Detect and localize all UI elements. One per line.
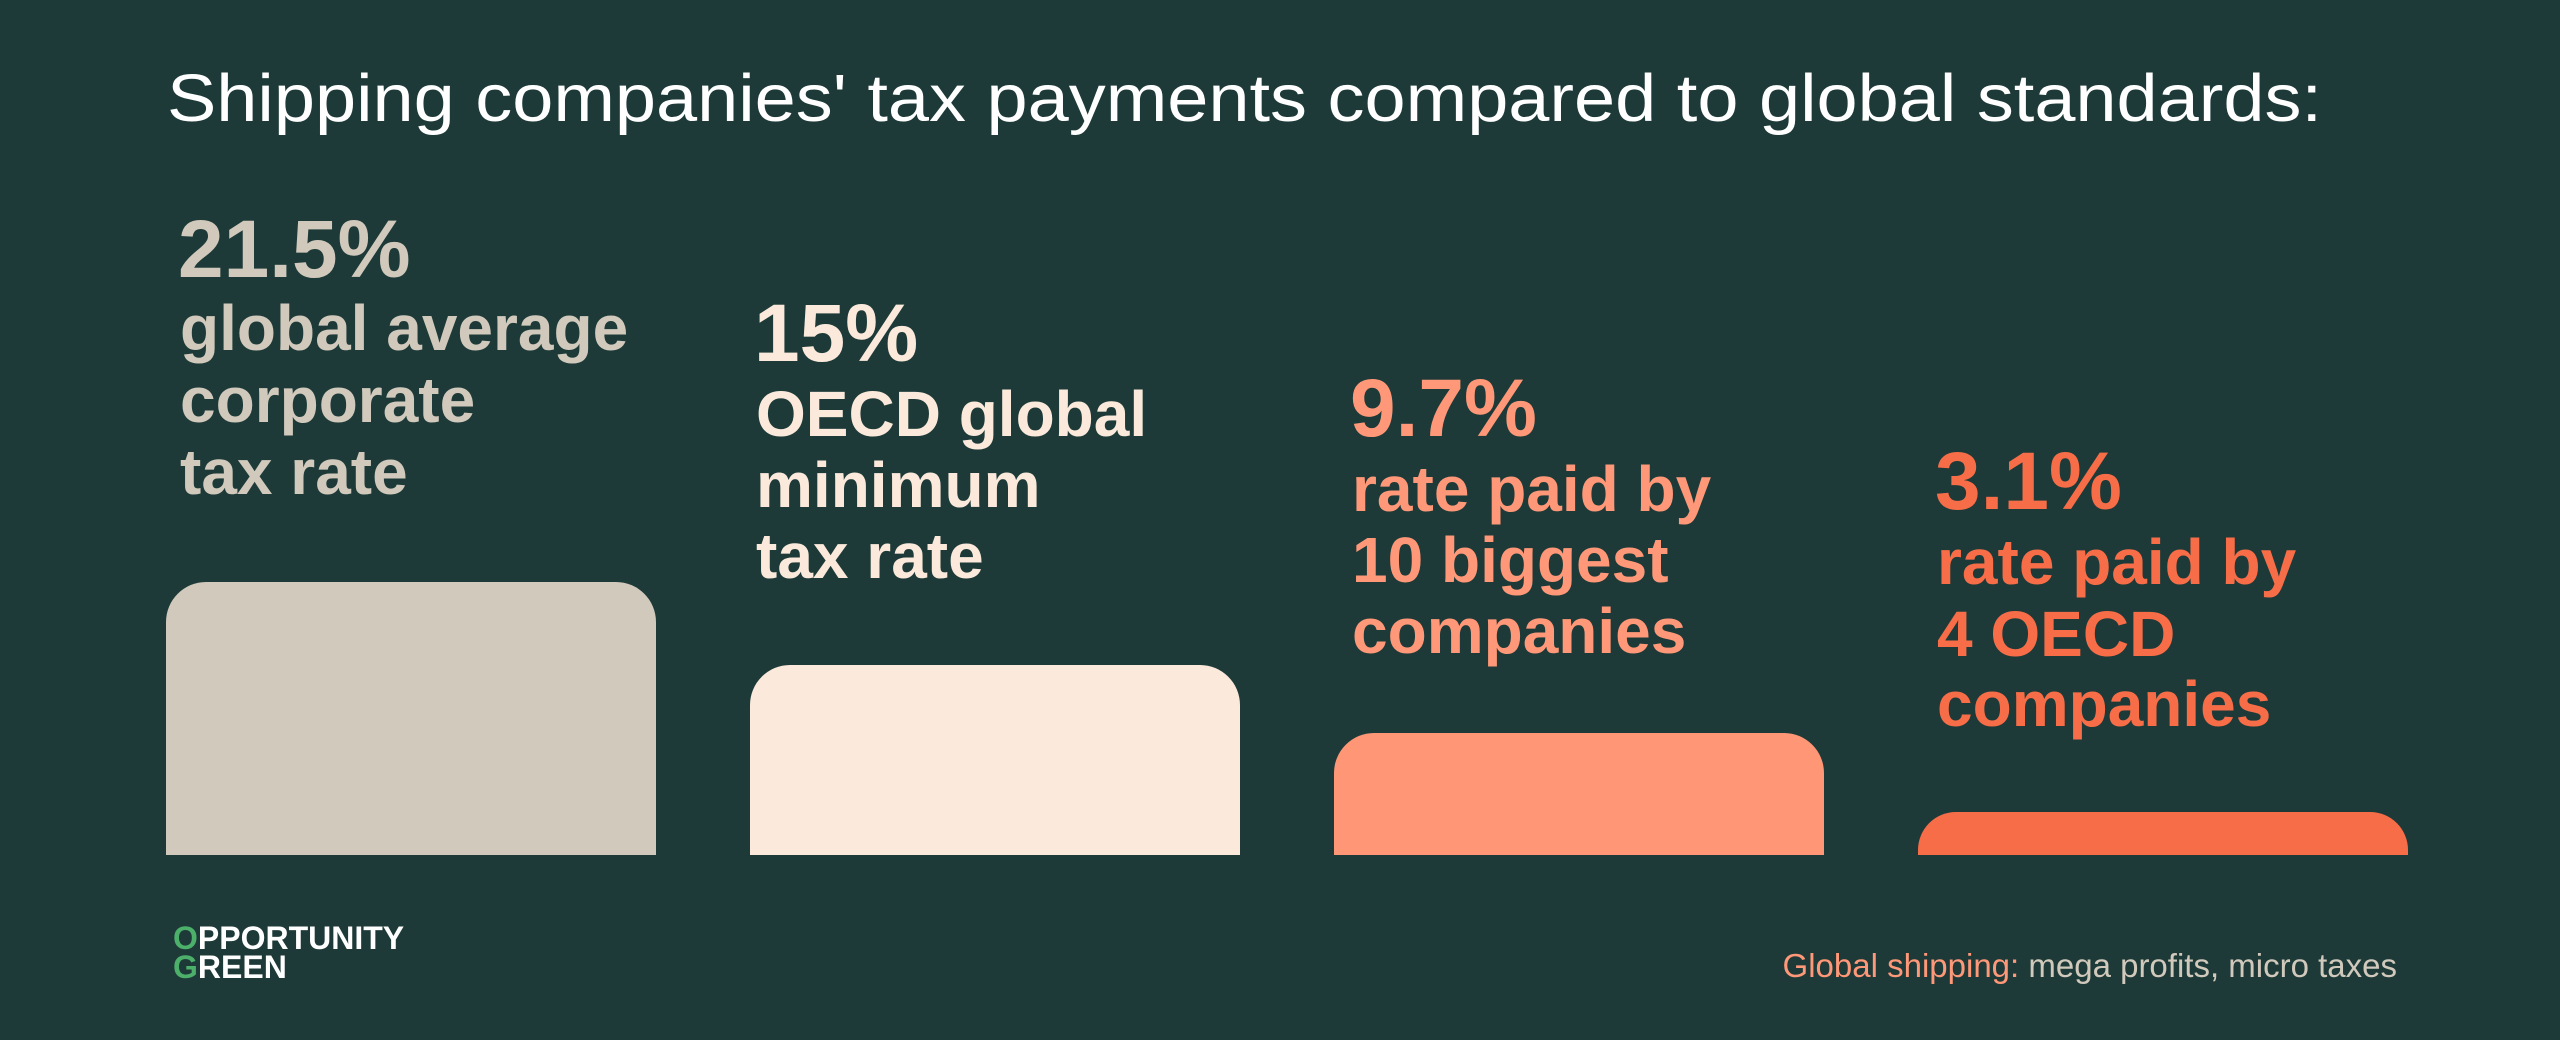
bar: 21.5% [166,582,656,855]
label: rate paid by 4 OECD companies: 4 OECD [1937,598,2175,670]
label: rate paid by 4 OECD companies [1937,526,2297,740]
panel: OECD minimum [750,288,1240,855]
label: rate paid by 10 biggest companies: companies [1352,595,1686,667]
title: Shipping companies' tax payments compared to global standards: [167,61,2322,136]
label: global average corporate tax rate: tax rate [180,436,408,508]
panel: 4 OECD companies [1918,436,2408,855]
label: rate paid by 4 OECD companies: rate paid by [1937,526,2297,598]
label: global average corporate tax rate: global average [180,292,628,364]
label: OECD global minimum tax rate [756,378,1147,592]
bar: 9.7% [1334,733,1824,855]
panel: 10 biggest companies [1334,363,1824,855]
label: global average corporate tax rate: corporate [180,364,475,436]
label: rate paid by 10 biggest companies [1352,453,1712,667]
value: 3.1%: 3.1% [1935,436,2122,527]
logo: Opportunity Green: GREEN [173,949,287,985]
label: rate paid by 4 OECD companies: companies [1937,668,2271,740]
value: 15%: 15% [754,288,918,379]
label: rate paid by 10 biggest companies: 10 biggest [1352,524,1669,596]
value: 9.7%: 9.7% [1350,363,1537,454]
logo: Opportunity Green [173,920,404,985]
label: OECD global minimum tax rate: tax rate [756,520,984,592]
value: 21.5%: 21.5% [178,204,411,295]
bar: 3.1% [1918,812,2408,855]
logo: Opportunity Green: OPPORTUNITY [173,920,404,956]
label: OECD global minimum tax rate: OECD global [756,378,1147,450]
label: rate paid by 10 biggest companies: rate paid by [1352,453,1712,525]
label: global average corporate tax rate [180,292,628,508]
panel: global average [166,204,656,855]
label: OECD global minimum tax rate: minimum [756,449,1040,521]
footer caption: Global shipping: mega profits, micro taxes [1783,947,2397,984]
bar: 15% [750,665,1240,855]
